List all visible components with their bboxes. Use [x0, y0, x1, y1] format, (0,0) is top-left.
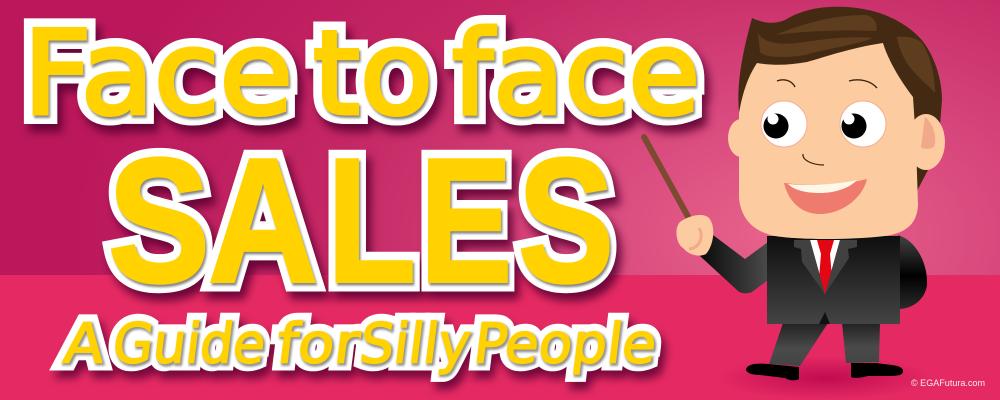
subtitle: A Guide for Silly People: Silly [358, 315, 476, 378]
title: SALES: A [208, 122, 318, 320]
title: SALES: S [520, 124, 616, 322]
title: Face to face: face [452, 6, 700, 142]
title: Face to face: to [318, 14, 438, 150]
title: SALES: E [422, 124, 514, 322]
subtitle: A Guide for Silly People: for [273, 313, 363, 376]
subtitle: A Guide for Silly People: Guide [111, 315, 271, 378]
floor [0, 275, 1000, 400]
left shoe [746, 364, 799, 380]
background wall [0, 0, 1000, 276]
title: SALES: A [213, 130, 323, 328]
inner ear [921, 117, 935, 149]
subtitle: A Guide for Silly People: A [62, 315, 110, 378]
hair back [738, 7, 942, 191]
title: SALES: E [420, 122, 512, 320]
copyright credit: © EGAFutura.com [911, 378, 985, 389]
title: Face to face: Face [28, 14, 298, 150]
title: SALES: S [518, 122, 614, 320]
title: Face to face: to [314, 9, 434, 144]
subtitle: A Guide for Silly People: for [273, 313, 363, 376]
subtitle: A Guide for Silly People: People [472, 315, 662, 378]
title: Face to face: Face [23, 6, 293, 142]
eyebrows [777, 80, 877, 88]
mouth [784, 179, 867, 214]
shirt [810, 240, 840, 294]
title: SALES: S [108, 122, 210, 320]
face [739, 43, 918, 239]
right eye [840, 101, 886, 147]
subtitle: A Guide for Silly People: Silly [361, 321, 479, 384]
left eye [761, 101, 807, 147]
title: SALES: L [327, 122, 416, 320]
left leg [769, 323, 828, 366]
title: Face to face: face [452, 6, 700, 142]
right shoe [851, 363, 903, 378]
title: SALES: L [327, 122, 416, 320]
title: SALES: L [328, 124, 418, 322]
title: SALES: E [425, 130, 517, 328]
jacket vent [819, 312, 830, 324]
back arm [898, 235, 927, 309]
subtitle: A Guide for Silly People: Guide [109, 313, 269, 376]
title: SALES: S [113, 130, 215, 328]
jacket [767, 236, 900, 324]
title: SALES: S [110, 124, 212, 322]
title: SALES: S [518, 122, 614, 320]
subtitle: A Guide for Silly People: A [60, 313, 108, 376]
teeth [788, 180, 857, 193]
title: SALES [108, 122, 619, 328]
title: Face to face: to [313, 6, 433, 142]
subtitle: A Guide for Silly People: Silly [356, 313, 474, 376]
title: Face to face: to [313, 6, 433, 142]
hand [676, 215, 713, 256]
subtitle: A Guide for Silly People: People [475, 321, 665, 384]
left ear [728, 119, 754, 157]
subtitle: A Guide for Silly People: for [275, 315, 365, 378]
tie [817, 240, 834, 294]
title: Face to face: face [457, 14, 705, 150]
subtitle: A Guide for Silly People: A [65, 321, 113, 384]
title: Face to face [23, 6, 705, 150]
subtitle: A Guide for Silly People [60, 313, 665, 384]
title: SALES: E [420, 122, 512, 320]
character: businessman [644, 7, 945, 380]
subtitle: A Guide for Silly People: Guide [114, 321, 274, 384]
right ear [907, 114, 945, 170]
pointing arm [700, 235, 768, 293]
pointer stick [644, 137, 691, 222]
nose [803, 154, 824, 165]
subtitle: A Guide for Silly People: Silly [356, 313, 474, 376]
title: SALES: A [210, 124, 320, 322]
title: Face to face: Face [24, 9, 294, 144]
title: SALES: S [108, 122, 210, 320]
subtitle: A Guide for Silly People: People [470, 313, 660, 376]
right leg [842, 323, 880, 363]
subtitle: A Guide for Silly People: for [278, 321, 368, 384]
title: Face to face: Face [23, 6, 293, 142]
lapels [794, 240, 857, 294]
floor shadow [715, 356, 935, 400]
title: Face to face: face [454, 9, 702, 144]
subtitle: A Guide for Silly People: A [60, 313, 108, 376]
subtitle: A Guide for Silly People: People [470, 313, 660, 376]
title: SALES: A [208, 122, 318, 320]
subtitle: A Guide for Silly People: Guide [109, 313, 269, 376]
title: SALES: S [523, 130, 619, 328]
hand crease [689, 228, 701, 249]
title: SALES: L [332, 130, 421, 328]
hair highlights [758, 15, 935, 93]
